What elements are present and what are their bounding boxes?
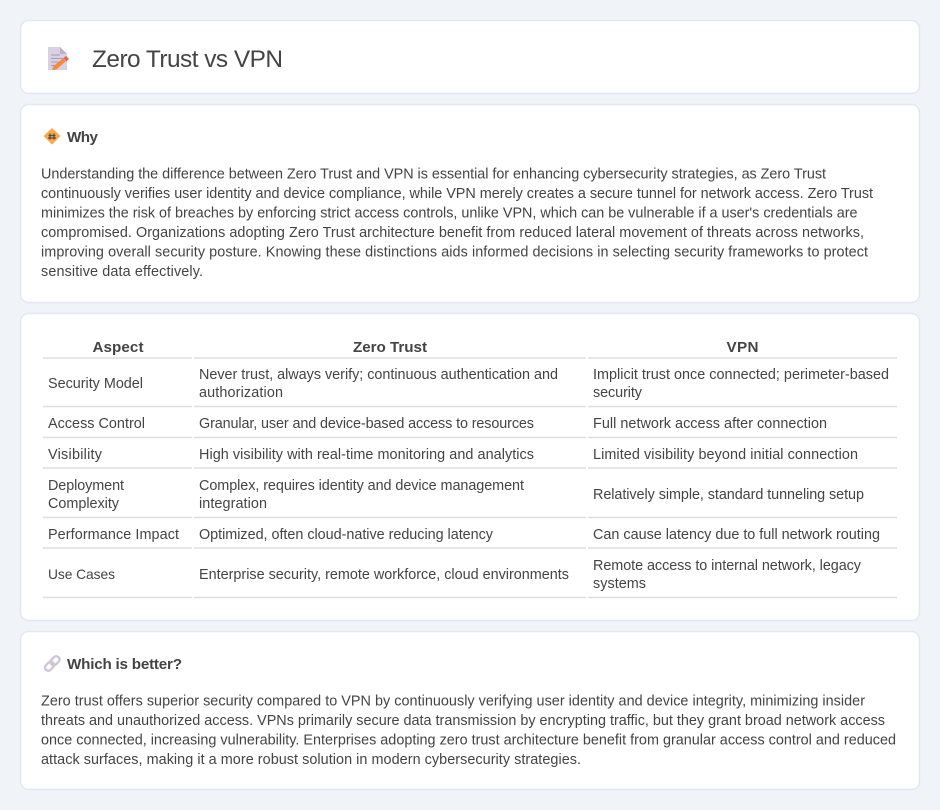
heading: which is better: Which is better? — [67, 656, 182, 673]
row: access control: Full network access after connection — [593, 416, 827, 432]
row: deployment complexity: Complexity — [48, 496, 120, 512]
row: deployment complexity: integration — [199, 496, 267, 512]
heading: title: Zero Trust vs VPN — [92, 46, 283, 73]
row: deployment complexity — [48, 478, 864, 512]
row: security model: security — [593, 385, 643, 401]
text block: why explanation: improving overall security posture. Knowing these distinctions aids informed decisions in selecting security frameworks to protect — [41, 244, 868, 260]
row: security model: Security Model — [48, 376, 143, 392]
row: performance impact: Performance Impact — [48, 527, 179, 543]
row: access control — [48, 416, 827, 432]
row: visibility: Visibility — [48, 447, 103, 463]
table header row: Zero Trust — [353, 339, 427, 356]
row: security model: authorization — [199, 385, 283, 401]
row: use cases: Enterprise security, remote workforce, cloud environments — [199, 567, 569, 583]
row: performance impact: Can cause latency due to full network routing — [593, 527, 880, 543]
row: visibility: High visibility with real-time monitoring and analytics — [199, 447, 534, 463]
panel: which is better — [20, 632, 920, 790]
row: deployment complexity: Relatively simple, standard tunneling setup — [593, 487, 864, 503]
row: use cases: systems — [593, 576, 646, 592]
row: security model: Never trust, always verify; continuous authentication and — [199, 367, 558, 383]
row: deployment complexity: Complex, requires identity and device management — [199, 478, 524, 494]
text block: why explanation: minimizes the risk of breaches by enforcing strict access controls, unlike VPN, which can be vulnerable if a user's credentials are — [41, 206, 858, 222]
panel: comparison table — [20, 314, 920, 620]
text block: why explanation: Understanding the difference between Zero Trust and VPN is essential for enhancing cybersecurity strategies, as Zero Trust — [41, 166, 826, 182]
heading: why: Why — [67, 129, 99, 146]
row: visibility: Limited visibility beyond initial connection — [593, 447, 858, 463]
row: performance impact — [48, 527, 880, 543]
icon: warning diamond — [44, 128, 60, 144]
text block: verdict: Zero trust offers superior security compared to VPN by continuously verifying user identity and device integrity, minimizing insider — [41, 694, 865, 710]
row: security model — [48, 367, 889, 401]
text block: verdict: once connected, increasing vulnerability. Enterprises adopting zero trust architecture benefit from granular access control and reduced — [41, 732, 896, 748]
row: access control: Granular, user and device-based access to resources — [199, 416, 534, 432]
panel: why — [20, 104, 920, 302]
panel: title — [20, 20, 920, 94]
text block: why explanation — [41, 166, 873, 280]
row: access control: Access Control — [48, 416, 145, 432]
text block: why explanation: continuously verifies user identity and device compliance, while VPN merely creates a secure tunnel for network access. Zero Trust — [41, 186, 873, 202]
icon: document with pencil — [48, 47, 69, 70]
table header row: VPN — [726, 339, 758, 356]
icon: link — [44, 655, 61, 672]
text block: verdict: threats and unauthorized access. VPNs primarily secure data transmission by encrypting traffic, but they grant broad network access — [41, 713, 885, 729]
row: visibility — [48, 447, 858, 463]
text block: verdict: attack surfaces, making it a more robust solution in modern cybersecurity strategies. — [41, 752, 581, 768]
row: performance impact: Optimized, often cloud-native reducing latency — [199, 527, 494, 543]
row: use cases — [48, 558, 862, 592]
text block: why explanation: compromised. Organizations adopting Zero Trust architecture benefit from reduced lateral movement of threats across networks, — [41, 225, 864, 241]
table header row: Aspect — [92, 339, 144, 356]
row: use cases: Remote access to internal network, legacy — [593, 558, 862, 574]
text block: why explanation: sensitive data effectively. — [41, 264, 203, 280]
table header row — [92, 339, 758, 356]
row: deployment complexity: Deployment — [48, 478, 124, 494]
row: use cases: Use Cases — [48, 567, 115, 582]
row: security model: Implicit trust once connected; perimeter-based — [593, 367, 889, 383]
text block: verdict — [41, 694, 896, 768]
